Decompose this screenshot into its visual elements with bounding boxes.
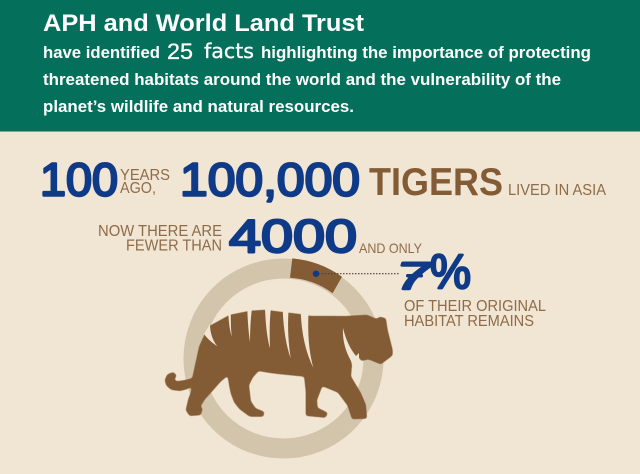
stat: now fewer than 4000: FEWER THAN xyxy=(126,238,222,254)
stat: 100,000 tigers lived in Asia: LIVED IN ASIA xyxy=(508,182,606,199)
intro text block: planet’s wildlife and natural resources. xyxy=(43,98,354,116)
stat: 7 percent of habitat remains: % xyxy=(430,246,471,299)
stat: now fewer than 4000: AND ONLY xyxy=(359,240,423,256)
icon: tiger silhouette xyxy=(166,308,392,418)
stat: 7 percent of habitat remains: OF THEIR ORIGINAL xyxy=(404,298,546,315)
panel: green header xyxy=(0,0,640,132)
stat: 100,000 tigers lived in Asia xyxy=(180,154,606,206)
stat: 100 years ago: YEARS xyxy=(120,167,170,184)
intro text block: have identified xyxy=(43,44,160,62)
heading: APH and World Land Trust xyxy=(43,10,364,37)
ring segment: remaining habitat xyxy=(290,258,342,293)
stat: 7 percent of habitat remains: HABITAT REMAINS xyxy=(404,313,534,330)
stat: 100,000 tigers lived in Asia: 100,000 xyxy=(180,154,360,206)
ring chart: 7 percent of habitat xyxy=(194,258,374,448)
intro text block: 25 xyxy=(167,39,193,64)
stat: 100 years ago xyxy=(40,154,170,206)
stat: 7 percent of habitat remains: 7 xyxy=(396,256,433,298)
stat: 100 years ago: AGO, xyxy=(120,180,156,197)
intro text block: highlighting the importance of protecting xyxy=(261,44,591,62)
stat: 100,000 tigers lived in Asia: TIGERS xyxy=(369,161,503,204)
stat: 7 percent of habitat remains xyxy=(396,246,546,330)
intro text block: facts xyxy=(204,39,254,63)
intro text block xyxy=(43,39,591,116)
intro text block: threatened habitats around the world and the vulnerability of the xyxy=(43,71,561,89)
stat: 100 years ago: 100 xyxy=(40,154,118,206)
stat: now fewer than 4000 xyxy=(98,210,423,262)
stat: now fewer than 4000: NOW THERE ARE xyxy=(98,223,222,240)
tiger stripes xyxy=(204,308,359,369)
callout: dotted leader line xyxy=(313,270,400,277)
stat: now fewer than 4000: 4000 xyxy=(229,210,357,262)
